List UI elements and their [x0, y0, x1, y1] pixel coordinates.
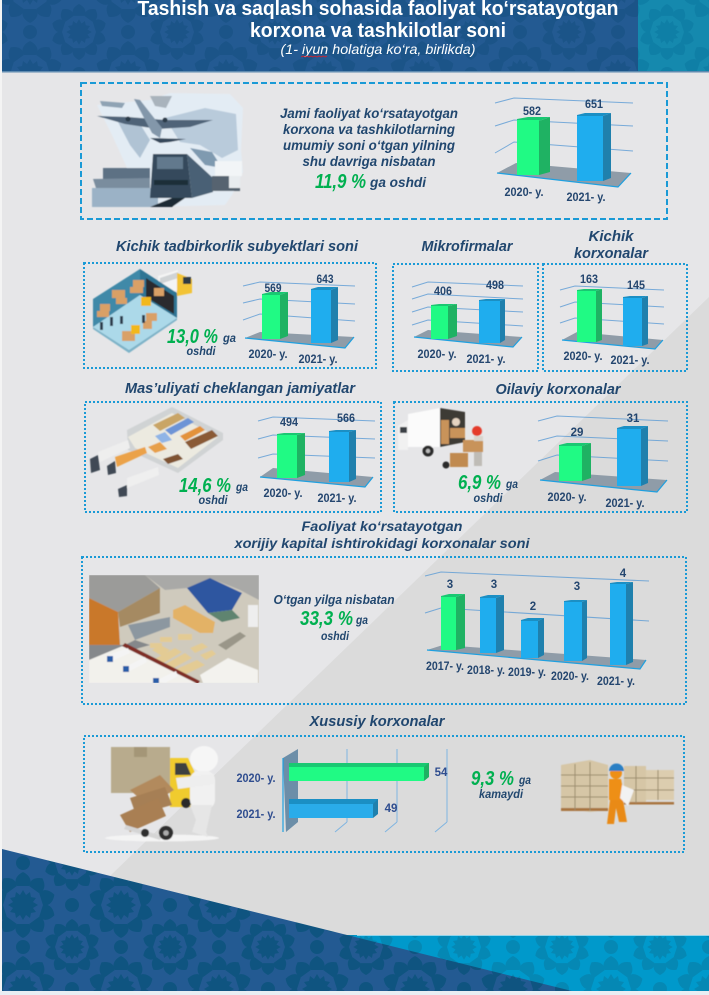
bar chart: horizontal 2020 vs 2021	[236, 749, 448, 832]
footer band	[0, 849, 709, 995]
bar chart: 2017 to 2021: 2018- y.	[467, 665, 505, 677]
stat: 33,3 %: ga	[355, 613, 368, 627]
bar chart: horizontal 2020 vs 2021: 49	[385, 803, 397, 815]
panel: small enterprises	[543, 264, 687, 371]
bar chart: 2017 to 2021	[425, 568, 649, 688]
bar chart: 2020 vs 2021: 569	[264, 283, 282, 295]
illustration: transport collage	[92, 93, 243, 207]
stat: 14,6 %: ga	[235, 480, 248, 494]
stat: 33,3 %: O‘tgan yilga nisbatan	[274, 592, 395, 607]
panel: foreign capital enterprises	[82, 557, 686, 704]
bar chart: 2020 vs 2021: 2020- y.	[504, 187, 544, 199]
stat: 33,3 %	[274, 592, 395, 643]
illustration: logistics complex	[89, 575, 259, 684]
bar chart: 2020 vs 2021: 494	[280, 417, 299, 429]
bar chart: 2020 vs 2021: 31	[627, 413, 640, 425]
stat: 13,0 %: oshdi	[186, 344, 216, 358]
stat: 33,3 %: 33,3 %	[300, 608, 353, 630]
stat: 13,0 %	[167, 326, 236, 358]
panel: total enterprises	[81, 83, 667, 219]
bar chart: 2020 vs 2021	[243, 274, 355, 366]
stat: 14,6 %: oshdi	[198, 493, 228, 507]
bar chart: 2017 to 2021: 3	[574, 581, 580, 593]
bar chart: 2017 to 2021: 2	[530, 601, 536, 613]
bar chart: 2020 vs 2021: 2020- y.	[418, 349, 456, 361]
stat: 9,3 %: kamaydi	[479, 787, 524, 801]
heading: small business: Kichik tadbirkorlik subyektlari soni	[116, 238, 359, 255]
illustration: worker with pallets	[561, 760, 674, 824]
bar chart: 2020 vs 2021: 163	[580, 274, 598, 286]
heading: small enterprises	[574, 228, 649, 262]
illustration: logistics hall with trucks	[90, 407, 223, 497]
panel: LLCs	[85, 402, 381, 512]
stat: 13,0 %: ga	[222, 331, 236, 345]
bar chart: 2020 vs 2021: 2020- y.	[548, 492, 586, 504]
bar chart: 2020 vs 2021	[538, 413, 668, 510]
stat: 6,9 %: ga	[505, 477, 518, 491]
bar chart: 2017 to 2021: 3	[447, 579, 453, 591]
bar chart: 2020 vs 2021: 566	[337, 413, 355, 425]
heading: microfirms: Mikrofirmalar	[422, 238, 514, 255]
heading: private enterprises: Xususiy korxonalar	[309, 713, 446, 730]
bar chart: 2020 vs 2021: 582	[523, 106, 541, 118]
text: description: shu davriga nisbatan	[302, 154, 436, 169]
heading: family enterprises: Oilaviy korxonalar	[496, 381, 622, 398]
bar chart: 2020 vs 2021: 2021- y.	[610, 355, 650, 367]
bar chart: 2020 vs 2021	[560, 274, 664, 367]
heading: small enterprises: Kichik	[588, 228, 634, 245]
stat: 9,3 %: 9,3 %	[471, 768, 514, 790]
bar chart: 2020 vs 2021	[258, 413, 375, 505]
title: (1- iyun holatiga ko‘ra, birlikda)	[280, 41, 476, 57]
text: description: ga oshdi	[369, 175, 426, 190]
heading: LLCs: Mas’uliyati cheklangan jamiyatlar	[125, 380, 356, 397]
bar chart: 2020 vs 2021: 29	[571, 427, 583, 439]
text: description: umumiy soni o‘tgan yilning	[283, 138, 456, 153]
heading: foreign capital enterprises: Faoliyat ko‘rsatayotgan	[302, 518, 462, 534]
bar chart: 2020 vs 2021: 2021- y.	[606, 498, 644, 510]
bar chart: 2017 to 2021: 2021- y.	[597, 676, 635, 688]
bar chart: 2020 vs 2021: 145	[627, 280, 646, 292]
text: description: Jami faoliyat ko‘rsatayotgan	[280, 106, 458, 121]
bar chart: 2020 vs 2021	[412, 280, 523, 366]
bar chart: 2020 vs 2021: 2021- y.	[466, 354, 506, 366]
title	[138, 0, 618, 57]
title: korxona va tashkilotlar soni	[250, 20, 506, 42]
text: description: korxona va tashkilotlarning	[283, 122, 456, 137]
bar chart: horizontal 2020 vs 2021: 54	[435, 767, 448, 779]
bar chart: 2020 vs 2021: 651	[585, 99, 604, 111]
bar chart: 2020 vs 2021: 498	[486, 280, 505, 292]
bar chart: 2017 to 2021: 4	[620, 568, 627, 580]
stat: 14,6 %	[179, 475, 248, 507]
stat: 14,6 %: 14,6 %	[179, 475, 231, 497]
bar chart: 2020 vs 2021: 2021- y.	[566, 192, 606, 204]
panel: microfirms	[393, 264, 538, 371]
stat: 9,3 %: ga	[518, 773, 531, 787]
panel: private enterprises	[84, 736, 684, 852]
panel: family enterprises	[394, 402, 687, 512]
bar chart: 2020 vs 2021: 643	[316, 274, 334, 286]
bar chart: 2020 vs 2021: 2021- y.	[298, 354, 338, 366]
stat: 33,3 %: oshdi	[321, 629, 350, 643]
heading: foreign capital enterprises: xorijiy kapital ishtirokidagi korxonalar soni	[233, 535, 531, 551]
illustration: delivery truck	[398, 408, 483, 468]
bar chart: horizontal 2020 vs 2021: 2021- y.	[236, 809, 276, 821]
panel: small business	[84, 263, 376, 368]
bar chart: 2020 vs 2021: 2020- y.	[564, 351, 602, 363]
stat: 13,0 %: 13,0 %	[167, 326, 218, 348]
heading: small enterprises: korxonalar	[574, 245, 649, 262]
bar chart: 2020 vs 2021: 2020- y.	[264, 488, 302, 500]
bar chart: 2017 to 2021: 3	[491, 579, 497, 591]
stat: 6,9 %	[458, 472, 518, 505]
bar chart: 2020 vs 2021: 2020- y.	[248, 349, 288, 361]
bar chart: horizontal 2020 vs 2021: 2020- y.	[236, 773, 276, 785]
illustration: warehouse room	[93, 269, 192, 353]
text: description: 11,9 %	[315, 171, 366, 193]
illustration: worker with hand truck	[105, 746, 219, 842]
stat: 6,9 %: 6,9 %	[458, 472, 501, 494]
bar chart: 2017 to 2021: 2020- y.	[551, 671, 589, 683]
header band	[2, 0, 709, 72]
text: description	[280, 106, 458, 193]
stat: 6,9 %: oshdi	[474, 491, 503, 505]
bar chart: 2017 to 2021: 2017- y.	[426, 661, 464, 673]
bar chart: 2020 vs 2021	[495, 98, 633, 204]
bar chart: 2020 vs 2021: 2021- y.	[318, 493, 356, 505]
bar chart: 2017 to 2021: 2019- y.	[508, 667, 546, 679]
stat: 9,3 %	[471, 768, 531, 801]
heading: foreign capital enterprises	[233, 518, 531, 551]
bar chart: 2020 vs 2021: 406	[434, 286, 452, 298]
